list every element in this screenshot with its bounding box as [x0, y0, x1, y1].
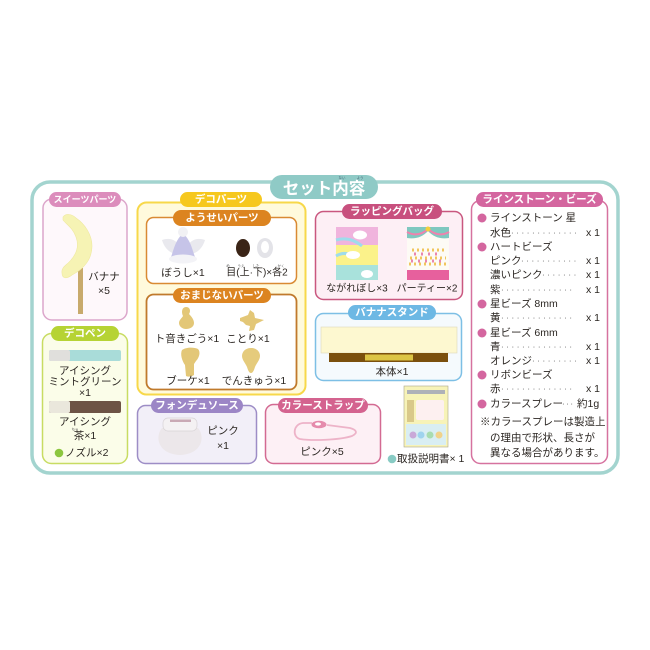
- list: items: 水色: [490, 227, 511, 239]
- list: items: リボンビーズ: [490, 368, 552, 381]
- list: items: カラースプレー: [490, 398, 563, 410]
- icon: brown icing pen: [49, 401, 121, 413]
- label: music note: ト音きごう×1: [155, 332, 219, 345]
- label: eyes: め: [226, 264, 230, 268]
- list: items: x 1: [586, 312, 600, 324]
- label: party: パーティー×2: [397, 282, 458, 294]
- panel: fondue sauce: フォンデュソース: [155, 398, 239, 412]
- list: items: 黄: [490, 311, 500, 324]
- label: brown icing: [59, 415, 111, 442]
- icon: bird: [240, 310, 264, 331]
- panel: wrapping bag: ラッピングバッグ: [350, 204, 434, 218]
- list: items: 星ビーズ 6mm: [490, 326, 558, 339]
- list: items: ·······: [542, 270, 579, 280]
- list: items: 青: [490, 340, 500, 353]
- label: banana: バナナ: [88, 271, 120, 283]
- list: items: ·············: [511, 228, 579, 238]
- panel: deco pens: デコペン: [64, 326, 106, 340]
- list: items: ·········: [532, 356, 579, 366]
- panel: charm parts: おまじないパーツ: [180, 290, 264, 302]
- label: hat: ぼうし×1: [161, 267, 205, 279]
- panel: fairy parts: [146, 210, 296, 284]
- label: banana: [88, 271, 120, 297]
- list: items: ピンク: [490, 255, 522, 267]
- label: bulb: でんきゅう×1: [222, 375, 286, 387]
- panel: color strap: [266, 398, 380, 464]
- panel: fairy parts: ようせいパーツ: [185, 212, 259, 224]
- panel: deco parts: [138, 192, 306, 394]
- icon: party bag: [407, 226, 449, 280]
- list: items: ··············: [501, 384, 575, 394]
- icon: eye parts: [236, 238, 273, 258]
- label: eyes: 目(上·下)×各2: [226, 266, 288, 278]
- icon: hat: [162, 227, 205, 264]
- icon: bouquet: [181, 348, 199, 377]
- panel: rhinestones and beads: [472, 192, 608, 464]
- note: color spray: [480, 415, 605, 459]
- panel: deco parts: デコパーツ: [195, 192, 247, 206]
- title: よう: [356, 175, 364, 180]
- list: items: 紫: [490, 283, 501, 296]
- label: instruction manual: 取扱説明書× 1: [397, 452, 465, 465]
- title: セット内容: [283, 178, 366, 198]
- list: items: 濃いピンク: [490, 268, 542, 281]
- label: bouquet: ブーケ×1: [166, 374, 210, 387]
- panel: deco pens: [42, 326, 128, 464]
- panel: sweet parts: スイーツパーツ: [54, 194, 116, 204]
- label: pink strap: ピンク×5: [300, 446, 344, 458]
- panel: charm parts: [146, 288, 296, 390]
- label: eyes: かく: [278, 263, 284, 268]
- note: color spray: の理由で形状、長さが: [490, 431, 595, 444]
- note: color spray: 異なる場合があります。: [490, 446, 604, 459]
- label: eyes: うえ: [238, 263, 245, 268]
- icon: shooting star bag: [336, 227, 378, 280]
- list: items: x 1: [586, 341, 600, 353]
- label: shooting star: ながれぼし×3: [326, 282, 388, 294]
- label: mint icing: ミントグリーン: [49, 375, 121, 388]
- list: items: x 1: [586, 269, 600, 281]
- list: items: ラインストーン 星: [490, 212, 576, 224]
- label: mint icing: ×1: [79, 387, 91, 399]
- icon: banana on stick: [62, 214, 92, 314]
- panel: rhinestones and beads: ラインストーン・ビーズ: [482, 192, 597, 206]
- icon: instruction manual: [404, 386, 448, 447]
- panel: sweet parts: [43, 192, 127, 320]
- icon: light bulb: [242, 348, 260, 373]
- label: banana: ×5: [98, 285, 110, 297]
- label: mint icing: [49, 364, 121, 399]
- label: eyes: した: [252, 263, 260, 268]
- label: nozzle: ノズル×2: [65, 446, 109, 459]
- list: items: オレンジ: [490, 355, 532, 367]
- list: items: ··············: [501, 342, 575, 352]
- panel: wrapping bag: [316, 204, 462, 300]
- list: items: 星ビーズ 8mm: [490, 297, 558, 310]
- note: color spray: ※カラースプレーは製造上: [480, 415, 605, 428]
- label: pink sauce: ×1: [217, 440, 229, 452]
- list: items: x 1: [586, 355, 600, 367]
- icon: stand: [321, 327, 457, 362]
- list: items: x 1: [586, 227, 600, 239]
- icon: sauce jar: [158, 418, 202, 455]
- label: brown icing: アイシング: [59, 415, 111, 428]
- panel: banana stand: バナナスタンド: [355, 306, 429, 318]
- list: items: ··············: [501, 286, 575, 294]
- panel: banana stand: [316, 305, 462, 380]
- outer panel: [32, 182, 618, 473]
- list: items: ··············: [501, 314, 575, 322]
- icon: music note: [179, 307, 194, 329]
- list: items: [478, 212, 600, 410]
- title: [270, 175, 378, 199]
- label: mint icing: アイシング: [59, 364, 111, 377]
- title: ない: [338, 175, 346, 180]
- list: items: x 1: [586, 284, 600, 296]
- list: items: ···········: [521, 256, 579, 266]
- label: bird: ことり×1: [226, 333, 270, 345]
- list: items: ···: [562, 400, 574, 408]
- label: brown icing: 茶×1: [74, 429, 96, 442]
- list: items: 約1g: [577, 397, 599, 410]
- label: body: 本体×1: [376, 365, 409, 378]
- icon: strap: [295, 421, 356, 440]
- label: brown icing: ちゃ: [72, 426, 78, 432]
- list: items: 赤: [490, 383, 501, 395]
- list: items: ハートビーズ: [490, 240, 552, 253]
- list: items: x 1: [586, 383, 600, 395]
- panel: fondue sauce: [138, 398, 256, 464]
- label: pink sauce: [207, 425, 239, 452]
- icon: mint green icing pen: [49, 350, 121, 361]
- list: items: x 1: [586, 255, 600, 267]
- panel: color strap: カラーストラップ: [281, 400, 365, 412]
- label: pink sauce: ピンク: [207, 425, 239, 437]
